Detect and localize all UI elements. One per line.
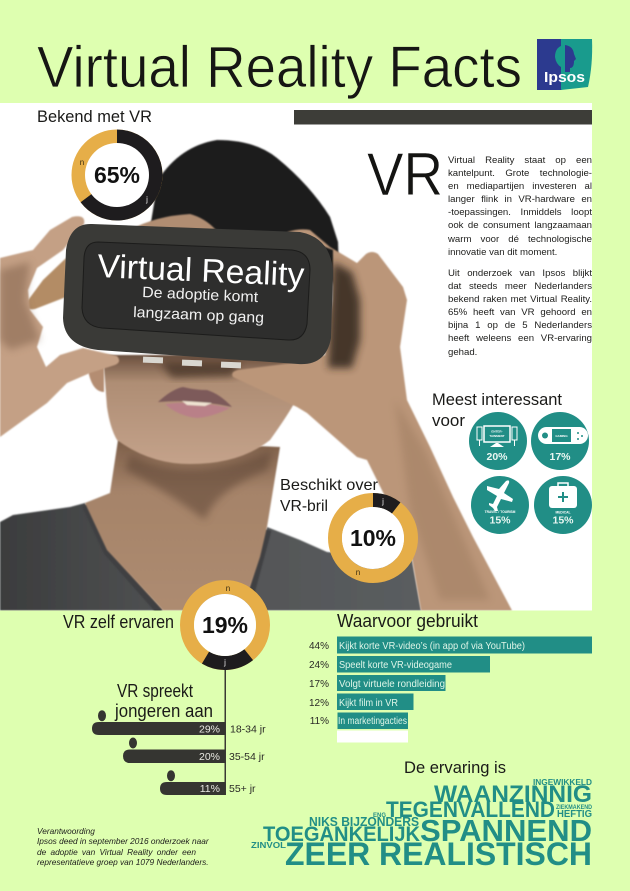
intro paragraph 2: dat steeds meer Nederlanders — [448, 281, 592, 292]
right forearm shading — [395, 400, 490, 600]
footnote: Verantwoording — [37, 826, 209, 867]
logo: Ipsos — [537, 39, 592, 90]
intro paragraph 2: gehad. — [448, 347, 477, 358]
top bar — [294, 110, 592, 124]
left hand shading — [0, 262, 40, 350]
word cloud: SPANNEND — [420, 813, 592, 848]
icon: medical 15%: MEDICAL — [555, 510, 571, 514]
headset subtitle line 1: De adoptie komt — [142, 284, 259, 306]
right hand palm shadow — [328, 262, 360, 368]
icon: travel 15%: 15% — [489, 514, 511, 526]
icon: medical 15%: 15% — [552, 514, 574, 526]
footnote: Verantwoording: Verantwoording — [37, 826, 95, 836]
heading: Meest interessant voor: voor — [432, 411, 465, 430]
white empty bar — [337, 730, 408, 742]
word cloud: HEFTIG — [557, 809, 592, 820]
icon: travel 15% — [471, 476, 529, 534]
shirt collar — [85, 505, 268, 612]
title: Virtual Reality Facts — [37, 35, 522, 100]
icon: medical 15% — [534, 476, 592, 534]
panel: white photo background — [0, 103, 592, 610]
headset buttons — [143, 357, 241, 368]
bar: 18-34: 18-34 jr — [230, 724, 266, 736]
word cloud: ENG — [373, 813, 386, 819]
right hand and arm — [232, 229, 512, 611]
nose shadow — [160, 362, 240, 378]
bar chart: usage — [309, 636, 592, 742]
left hand — [0, 216, 119, 437]
bar: game 24%: 24% — [309, 660, 329, 671]
intro paragraph 2: bijna 1 op de 5 Nederlanders — [448, 320, 592, 331]
face — [103, 355, 300, 464]
icon: entertainment 20%: ENTER- — [491, 430, 503, 434]
footnote: Verantwoording: representatieve groep van 1079 Nederlanders. — [37, 857, 209, 867]
footnote: Verantwoording: Ipsos deed in september 2016 onderzoek naar — [37, 836, 209, 846]
bottom green band over photo edge — [0, 610, 630, 891]
donut: beschikt 10% — [335, 497, 411, 577]
intro paragraph 1: ook de consument langzaamaan — [448, 220, 592, 231]
icon: travel 15%: TRAVEL / TOURISM — [485, 510, 516, 514]
ear — [88, 366, 104, 392]
bar: 55+: 11% — [200, 783, 220, 795]
donut label n: n — [80, 158, 84, 167]
word cloud — [251, 777, 593, 872]
word cloud: NIKS BIJZONDERS — [309, 814, 419, 829]
bar: video 44%: 44% — [309, 641, 329, 652]
forehead — [130, 214, 216, 230]
headset — [63, 224, 333, 368]
bar: 35-54: 20% — [199, 751, 220, 763]
bar: video 44%: Kijkt korte VR-video’s (in app of via YouTube) — [339, 641, 525, 652]
word cloud: INGEWIKKELD — [533, 777, 592, 787]
bar: game 24% — [309, 656, 490, 672]
donut centre — [85, 143, 149, 207]
hair — [150, 140, 340, 300]
intro paragraph 1 — [448, 155, 592, 258]
headset shell — [63, 224, 333, 364]
heading: Meest interessant voor — [432, 390, 562, 430]
bar: tour 17% — [309, 675, 446, 691]
donut: beschikt 10%: j — [381, 497, 384, 506]
bar: 18-34 — [92, 710, 266, 736]
headset subtitle line 2: langzaam op gang — [133, 304, 264, 327]
bar: 35-54: 35-54 jr — [229, 751, 265, 763]
heading: Beschikt over VR-bril — [280, 477, 379, 515]
bar: 18-34: 29% — [199, 724, 220, 736]
heading: Meest interessant voor: Meest interessant — [432, 390, 562, 409]
bar: 55+ — [160, 770, 256, 795]
word cloud: WAANZINNIG — [434, 781, 592, 808]
heading: VR spreekt jongeren aan: jongeren aan — [114, 701, 213, 721]
logo head left half — [555, 45, 565, 72]
intro paragraph 1: kantelpunt. Grote technologie- — [448, 168, 592, 179]
bar: 35-54 — [123, 738, 265, 763]
bar: tour 17%: 17% — [309, 679, 329, 690]
bar: film 12%: 12% — [309, 698, 329, 709]
bar: marketing 11% — [310, 712, 408, 729]
headset title: Virtual Reality — [97, 247, 306, 293]
bar: film 12%: Kijkt film in VR — [339, 698, 398, 709]
bar: marketing 11%: In marketingacties — [338, 716, 407, 727]
intro paragraph 2: bekend raken met Virtual Reality. — [448, 294, 592, 305]
icon: entertainment 20%: TAINMENT — [489, 434, 505, 438]
bar: tour 17%: Volgt virtuele rondleiding — [339, 679, 445, 690]
heading: Beschikt over VR-bril: Beschikt over — [280, 477, 379, 494]
shirt — [0, 503, 421, 610]
donut: beschikt 10%: n — [356, 568, 360, 577]
heading: De ervaring is: De ervaring is — [404, 758, 506, 777]
donut: zelf ervaren 19% — [187, 584, 263, 667]
heading: VR zelf ervaren: VR zelf ervaren — [63, 612, 174, 632]
word cloud: ZIEKMAKEND — [556, 805, 593, 811]
intro paragraph 2: Uit onderzoek van Ipsos blijkt — [448, 268, 592, 279]
neck shadow under chin — [125, 450, 272, 520]
axis line — [224, 660, 226, 795]
heading: Bekend met VR: Bekend met VR — [37, 107, 152, 126]
intro paragraph 1: Virtual Reality staat op een — [448, 155, 592, 166]
word cloud: ZEER REALISTISCH — [285, 836, 592, 872]
icon: entertainment 20%: 20% — [486, 451, 508, 463]
word cloud: TOEGANKELIJK — [263, 823, 420, 846]
bar: 55+: 55+ jr — [229, 783, 256, 795]
logo wordmark: Ipsos — [544, 69, 585, 86]
donut label j: j — [145, 195, 148, 204]
heading: VR spreekt jongeren aan — [114, 681, 213, 721]
lips — [158, 387, 232, 418]
donut ja segment — [86, 136, 155, 214]
logo teal field — [561, 39, 592, 90]
intro paragraph 1: en mediapartijen investeren al — [448, 181, 592, 192]
bar: film 12% — [309, 694, 414, 710]
logo blue field — [537, 39, 562, 90]
drop cap VR: VR — [367, 141, 443, 208]
donut: zelf ervaren 19%: n — [226, 584, 230, 593]
footnote: Verantwoording: de adoptie van Virtual Reality onder een — [37, 847, 196, 857]
photo: man wearing VR headset — [0, 140, 512, 612]
bar: game 24%: Speelt korte VR-videogame — [339, 660, 452, 671]
neck — [85, 440, 280, 610]
logo head right half — [565, 45, 576, 72]
icon: entertainment 20% — [469, 412, 527, 470]
heading: VR spreekt jongeren aan: VR spreekt — [117, 681, 193, 701]
left hand back finger — [26, 258, 66, 309]
donut: zelf ervaren 19%: 19% — [202, 612, 248, 638]
headset front panel — [82, 242, 310, 340]
icon: gaming 17%: 17% — [549, 451, 571, 463]
word cloud: TEGENVALLEND — [386, 797, 555, 822]
word cloud: ZINVOL — [251, 840, 286, 850]
bar chart: age groups — [92, 710, 266, 795]
donut: bekend 65% — [78, 136, 156, 214]
heading: Beschikt over VR-bril: VR-bril — [280, 498, 328, 515]
intro paragraph 1: innovatie van dit moment. — [448, 247, 557, 258]
bar: marketing 11%: 11% — [310, 716, 329, 727]
donut ring base — [78, 136, 156, 214]
intro paragraph 1: langer flink in VR-hardware en — [448, 194, 592, 205]
intro paragraph 2: heeft weleens een VR-ervaring — [448, 333, 592, 344]
icon: gaming 17%: GAMING — [555, 434, 568, 438]
bar: video 44% — [309, 636, 592, 654]
intro paragraph 1: warm voor dé technologische — [448, 234, 592, 245]
donut: beschikt 10%: 10% — [350, 525, 396, 551]
intro paragraph 2: 65% heeft van VR gehoord en — [448, 307, 592, 318]
intro paragraph 1: -toepassingen. Inmiddels loopt — [448, 207, 592, 218]
donut: zelf ervaren 19%: j — [223, 658, 226, 667]
intro paragraph 2 — [448, 268, 592, 358]
icon: gaming 17% — [531, 412, 589, 470]
donut value: 65% — [94, 162, 140, 188]
heading: Waarvoor gebruikt: Waarvoor gebruikt — [337, 611, 478, 631]
